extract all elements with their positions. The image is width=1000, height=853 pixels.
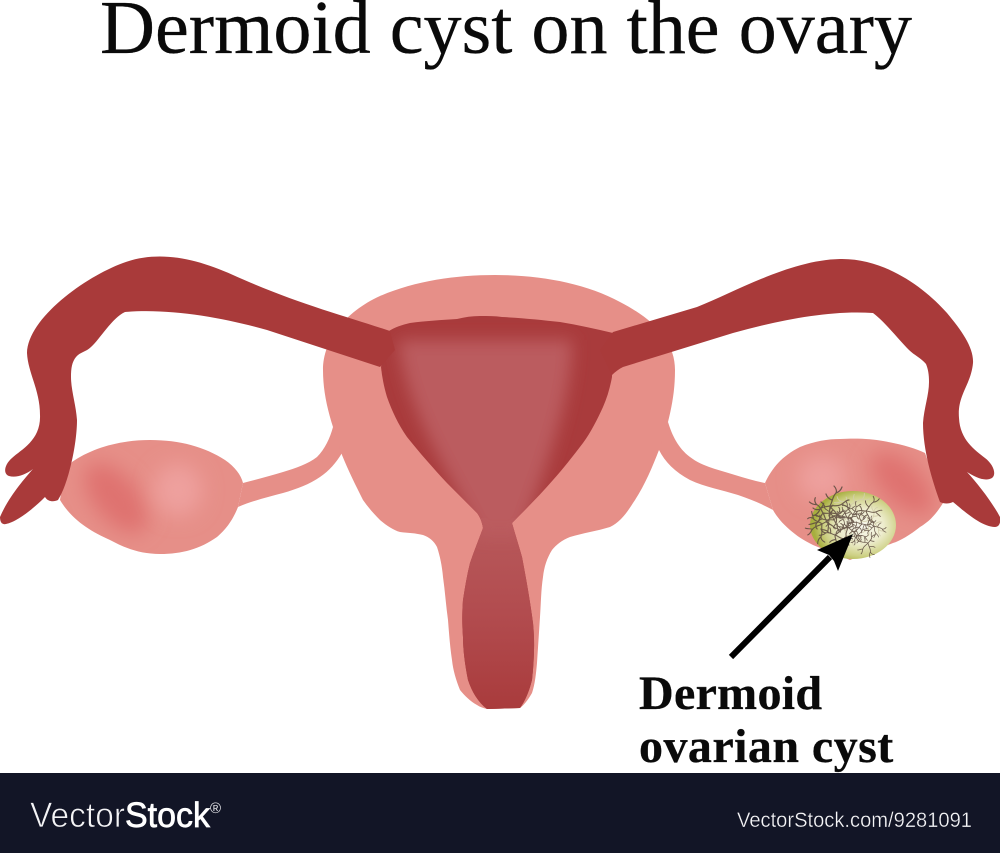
footer logo: Vector [30,796,125,835]
footer bar [0,773,1000,853]
left fallopian tube [0,257,395,524]
dermoid cyst [801,481,896,561]
right ovary [765,439,944,560]
dark hair [801,486,887,561]
left ovary [60,440,243,554]
footer image id: VectorStock.com/9281091 [737,809,972,832]
right ovarian ligament [650,422,773,510]
diagram: female reproductive system [0,257,1000,720]
right fallopian tube [600,259,1000,527]
arrow pointing at cyst [731,534,853,657]
uterus outer wall [323,275,675,709]
left ovarian ligament [238,427,350,507]
footer bar: ® [210,800,221,817]
uterine cavity and cervix [381,316,612,709]
faint inner hair [828,481,893,560]
label: Dermoid ovarian cyst: ovarian cyst [639,720,894,773]
label: Dermoid ovarian cyst: Dermoid [639,667,822,720]
footer bar: Stock [125,796,210,835]
